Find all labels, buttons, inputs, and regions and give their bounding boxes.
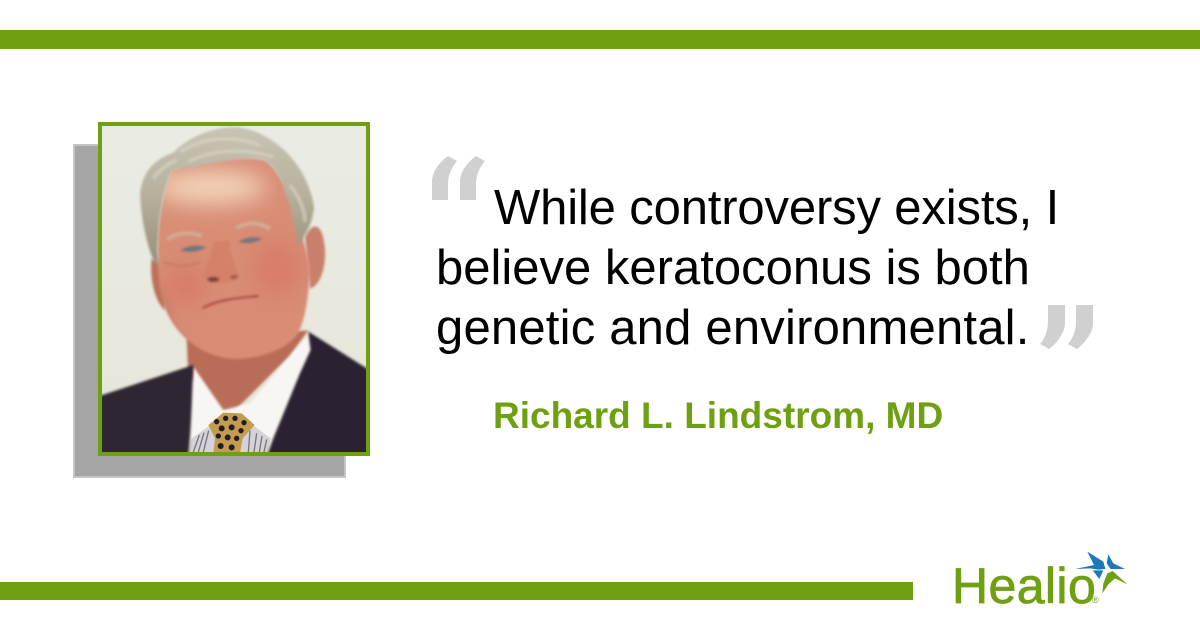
logo registered mark: ® xyxy=(1092,595,1099,605)
shirt stripes xyxy=(188,427,271,453)
bottom green bar xyxy=(0,582,913,600)
necktie xyxy=(208,413,255,453)
gray offset shadow panel xyxy=(73,144,346,478)
portrait photo with green frame xyxy=(98,122,370,456)
hair highlights xyxy=(153,139,305,222)
head: hair, ears, face xyxy=(140,127,325,415)
face skin with shading xyxy=(157,158,310,360)
eyebrows eyes nose mouth xyxy=(167,224,270,308)
suit jacket xyxy=(99,365,193,455)
quote text: believe keratoconus is both xyxy=(436,241,1030,295)
Healio logo xyxy=(952,552,1128,614)
ears and neck xyxy=(151,226,325,415)
quote text: While controversy exists, I xyxy=(494,181,1059,235)
attribution name: Richard L. Lindstrom, MD xyxy=(493,395,943,436)
quote text xyxy=(436,181,1059,355)
hair xyxy=(140,127,314,265)
opening quote mark xyxy=(432,156,485,200)
shirt collar xyxy=(188,335,311,452)
top green bar xyxy=(0,30,1200,49)
logo star xyxy=(1075,552,1128,594)
logo wordmark: Healio xyxy=(952,558,1096,614)
quote text: genetic and environmental. xyxy=(436,301,1030,355)
closing quote mark xyxy=(1040,305,1093,349)
